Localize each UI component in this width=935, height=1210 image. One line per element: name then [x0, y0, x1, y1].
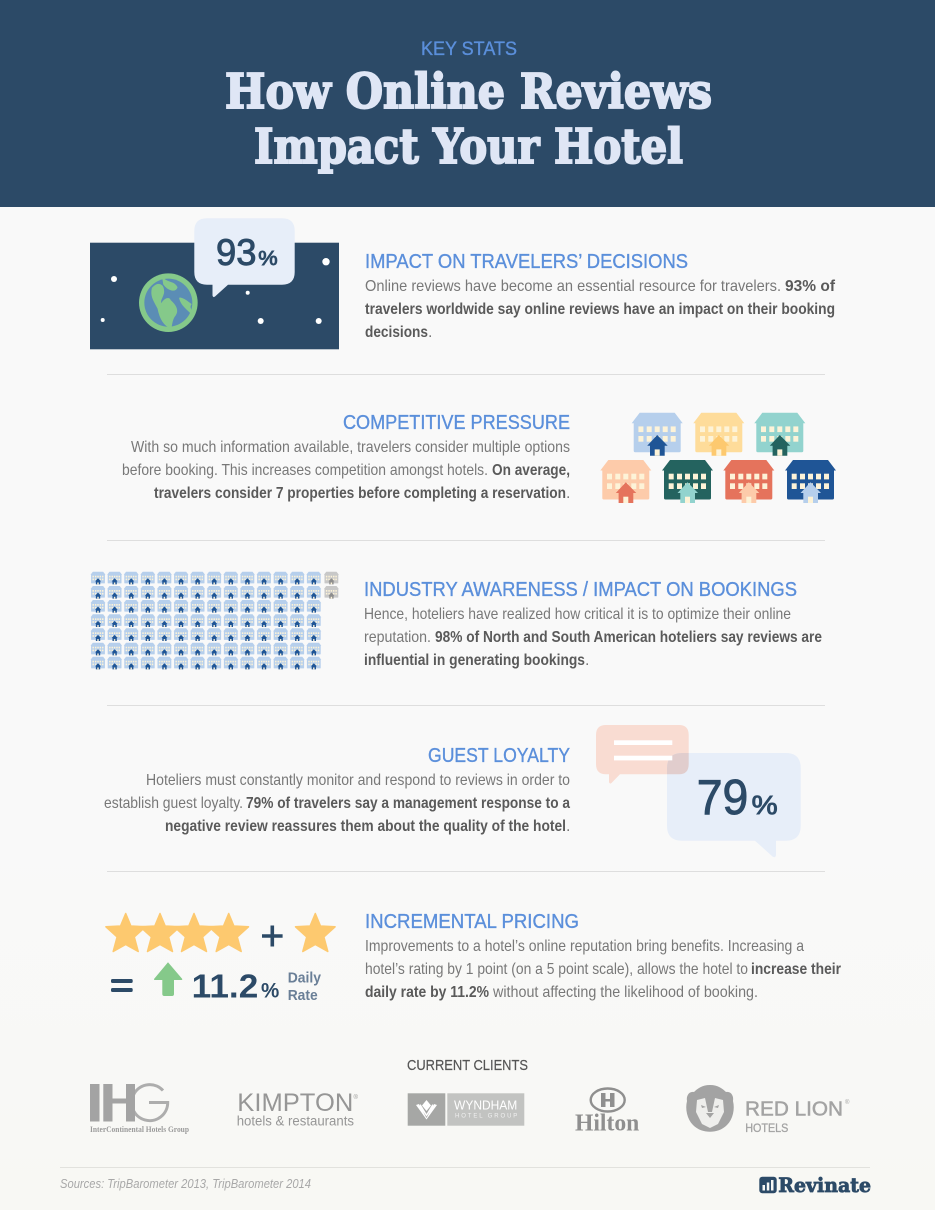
body text: 98% of North and South American hoteliers say reviews are [435, 629, 822, 646]
panel: industry awareness [90, 571, 822, 672]
title: Impact Your Hotel [254, 119, 683, 175]
body text: establish guest loyalty. [104, 795, 243, 812]
body text: travelers worldwide say online reviews have an impact on their booking [365, 301, 835, 318]
icon: speech bubbles with 79% [596, 725, 801, 857]
icon: stars equation with 11.2% daily rate: % [261, 979, 280, 1002]
body text: influential in generating bookings [364, 652, 585, 669]
logo: Red Lion: ® [845, 1099, 850, 1106]
heading: IMPACT ON TRAVELERS’ DECISIONS [365, 251, 688, 273]
body text: without affecting the likelihood of booking. [492, 984, 758, 1001]
icon: night sky with globe and 93% bubble [90, 218, 339, 349]
body text: . [566, 818, 570, 835]
body text: . [428, 324, 432, 341]
logo: Wyndham [408, 1093, 524, 1126]
logo: Wyndham: WYNDHAM [454, 1097, 517, 1112]
body text: decisions [365, 324, 428, 341]
body text: 93% of [785, 278, 836, 295]
body text: . [566, 485, 570, 502]
heading: INCREMENTAL PRICING [365, 911, 579, 933]
body text: 79% of travelers say a management response to a [246, 795, 570, 812]
logo: IHG: InterContinental Hotels Group [90, 1124, 189, 1134]
logo: Revinate: Revinate [778, 1173, 871, 1197]
body text: daily rate by 11.2% [365, 984, 489, 1001]
logo: Hilton: Hilton [575, 1111, 639, 1137]
body text: travelers consider 7 properties before completing a reservation [154, 485, 566, 502]
body text: On average, [492, 462, 570, 479]
body text [104, 772, 570, 835]
icon: stars equation with 11.2% daily rate: Rate [288, 988, 318, 1004]
title [225, 64, 712, 175]
icon: stars equation with 11.2% daily rate [106, 914, 335, 1004]
logo: Hilton [575, 1088, 639, 1137]
logo: Wyndham: HOTEL GROUP [455, 1114, 517, 1120]
body text: With so much information available, travelers consider multiple options [131, 439, 570, 456]
panel: competitive pressure [122, 412, 836, 503]
body text: negative review reassures them about the quality of the hotel [165, 818, 566, 835]
logo: Kimpton [237, 1089, 358, 1129]
body text: Hence, hoteliers have realized how critical it is to optimize their online [364, 606, 791, 623]
body text: Hoteliers must constantly monitor and respond to reviews in order to [146, 772, 570, 789]
logo: Kimpton: ® [354, 1094, 358, 1101]
body text [364, 606, 822, 669]
body text: Online reviews have become an essential resource for travelers. [365, 278, 781, 295]
title: How Online Reviews [225, 64, 712, 120]
logo: Red Lion: HOTELS [745, 1121, 788, 1135]
body text: Improvements to a hotel’s online reputation bring benefits. Increasing a [365, 938, 804, 955]
icon: night sky with globe and 93% bubble: 93 [216, 232, 256, 273]
body text: increase their [751, 961, 841, 978]
sources note: Sources: TripBarometer 2013, TripBarometer 2014 [60, 1177, 311, 1191]
icon: stars equation with 11.2% daily rate: Daily [288, 970, 321, 986]
heading: COMPETITIVE PRESSURE [343, 412, 570, 434]
header banner [0, 0, 935, 207]
icon: speech bubbles with 79%: 79 [697, 771, 748, 825]
heading: INDUSTRY AWARENESS / IMPACT ON BOOKINGS [364, 579, 797, 601]
body text [122, 439, 570, 502]
clients heading: CURRENT CLIENTS [407, 1058, 528, 1074]
icon: stars equation with 11.2% daily rate: 11.2 [192, 967, 258, 1004]
icon: seven hotels [600, 413, 836, 503]
panel: guest loyalty [104, 725, 801, 857]
body text: reputation. [364, 629, 431, 646]
body text [365, 278, 836, 341]
panel: incremental pricing [106, 911, 841, 1004]
logo: Kimpton: hotels & restaurants [237, 1114, 354, 1129]
icon: grid of hotels, 98 percent [90, 571, 340, 672]
body text: before booking. This increases competition amongst hotels. [122, 462, 488, 479]
icon: speech bubbles with 79%: % [752, 790, 778, 820]
logo: Red Lion: RED LION [745, 1098, 843, 1121]
logo: Kimpton: KIMPTON [237, 1089, 353, 1117]
body text: hotel’s rating by 1 point (on a 5 point scale), allows the hotel to [365, 961, 748, 978]
logo: Red Lion [686, 1085, 850, 1135]
eyebrow: key stats: KEY STATS [421, 38, 517, 60]
panel: impact on travelers' decisions [90, 218, 836, 349]
body text [365, 938, 841, 1001]
icon: night sky with globe and 93% bubble: % [258, 248, 278, 270]
heading: GUEST LOYALTY [428, 745, 570, 767]
logo: IHG [90, 1084, 189, 1134]
body text: . [585, 652, 589, 669]
